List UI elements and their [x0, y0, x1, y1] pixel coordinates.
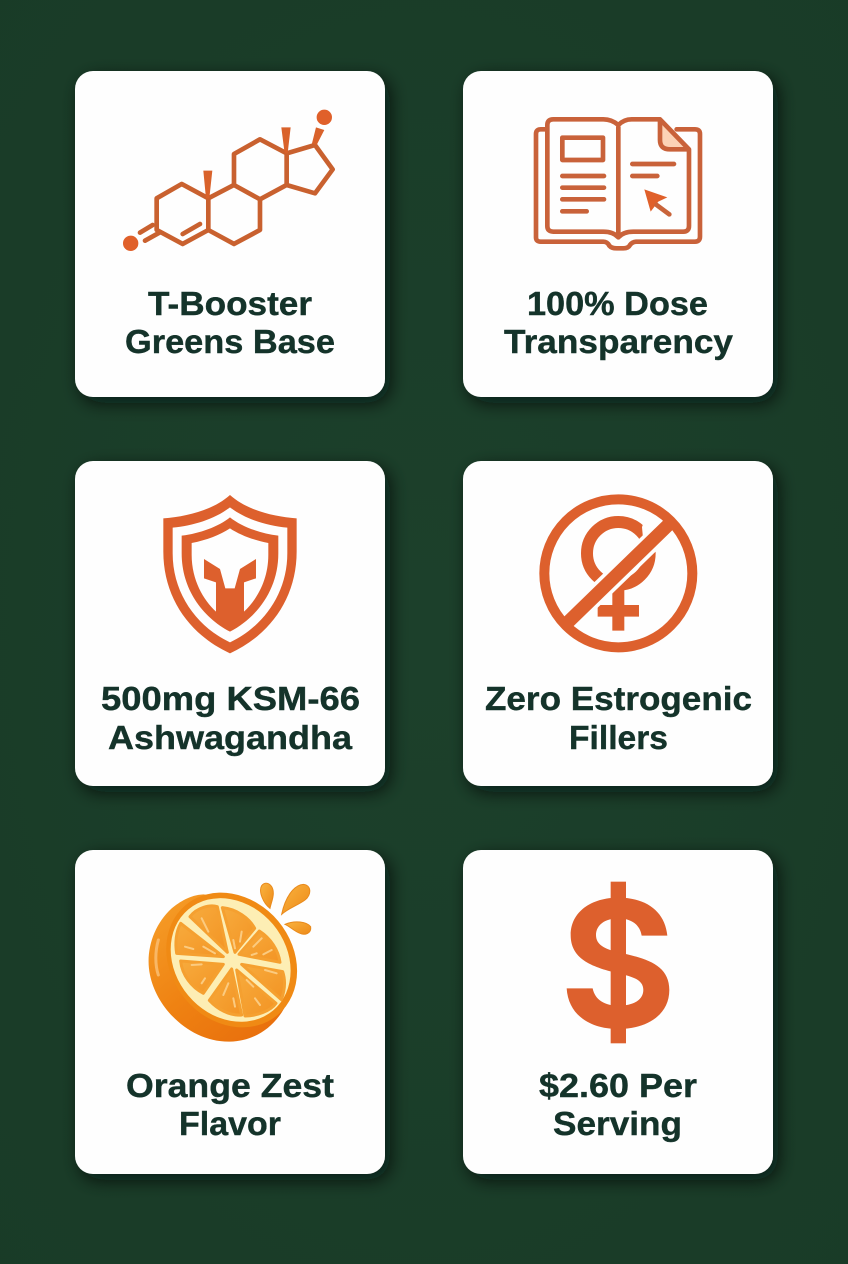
heading: T-Booster Greens Base: Greens Base — [125, 323, 335, 360]
heading: 500mg KSM-66 Ashwagandha: 500mg KSM-66 — [101, 680, 360, 717]
heading: Zero Estrogenic Fillers: Fillers — [569, 719, 668, 756]
heading: 100% Dose Transparency: 100% Dose — [527, 285, 708, 322]
heading: 500mg KSM-66 Ashwagandha: Ashwagandha — [108, 719, 353, 756]
heading: $2.60 Per Serving: Serving — [553, 1105, 682, 1142]
panel: Orange Zest Flavor — [75, 850, 385, 1174]
heading: Orange Zest Flavor — [126, 1067, 334, 1142]
heading: 100% Dose Transparency — [504, 285, 734, 360]
icon: shield with spartan helmet — [163, 495, 297, 653]
icon: orange slice with juice drops — [139, 866, 324, 1054]
heading: Zero Estrogenic Fillers: Zero Estrogenic — [485, 680, 752, 717]
icon: crossed-out female symbol — [544, 499, 692, 647]
icon: open book with cursor — [536, 119, 700, 248]
segment highlights — [185, 918, 277, 1007]
juice drops — [261, 883, 311, 934]
heading: $2.60 Per Serving: $2.60 Per — [539, 1067, 697, 1104]
icon: dollar sign — [567, 882, 669, 1043]
heading: 100% Dose Transparency: Transparency — [504, 323, 734, 360]
heading: T-Booster Greens Base: T-Booster — [148, 285, 312, 322]
panel: Zero Estrogenic Fillers — [463, 461, 773, 786]
heading: 500mg KSM-66 Ashwagandha — [101, 680, 360, 756]
panel: 500mg KSM-66 Ashwagandha — [75, 461, 385, 786]
heading: T-Booster Greens Base — [125, 285, 335, 360]
panel: 100% Dose Transparency — [463, 71, 773, 397]
heading: Orange Zest Flavor: Flavor — [179, 1105, 281, 1142]
heading: Zero Estrogenic Fillers — [485, 680, 752, 756]
heading: $2.60 Per Serving — [539, 1067, 697, 1142]
panel: $2.60 Per Serving — [463, 850, 773, 1174]
icon: steroid molecule — [123, 110, 333, 251]
panel: T-Booster Greens Base — [75, 71, 385, 397]
heading: Orange Zest Flavor: Orange Zest — [126, 1067, 334, 1104]
